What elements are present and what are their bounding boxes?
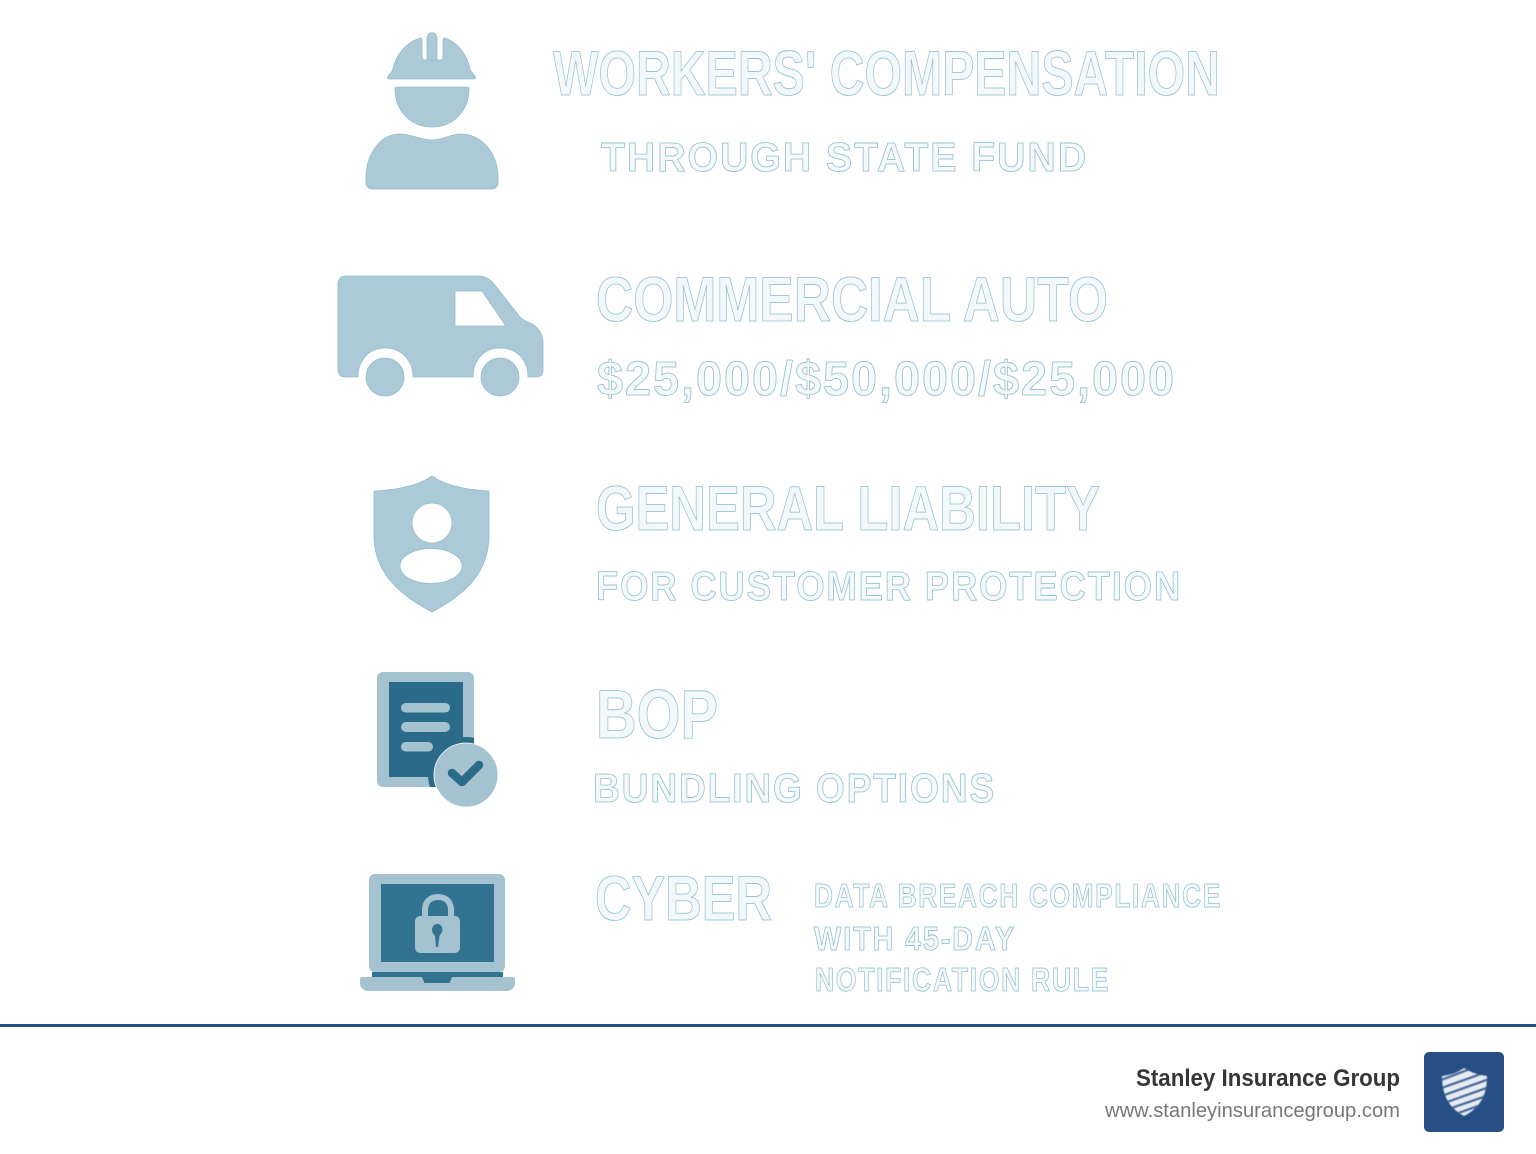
row: commercial auto: [338, 265, 1176, 406]
icon: delivery van: [338, 276, 543, 396]
text block: data breach compliance: NOTIFICATION RULE: [815, 961, 1110, 998]
brand name: Stanley Insurance Group: [1136, 1065, 1400, 1092]
row: cyber: [360, 864, 1222, 998]
icon: laptop with padlock: [360, 874, 515, 991]
icon: construction worker: [366, 33, 498, 189]
heading: commercial auto: COMMERCIAL AUTO: [596, 265, 1108, 335]
row: workers' compensation: [366, 33, 1220, 189]
text block: data breach compliance: DATA BREACH COMPLIANCE: [814, 877, 1222, 914]
subheading: bundling options: BUNDLING OPTIONS: [593, 765, 996, 811]
heading: cyber: CYBER: [595, 864, 772, 934]
row: general liability: [374, 474, 1182, 612]
subheading: for customer protection: FOR CUSTOMER PROTECTION: [596, 563, 1182, 609]
website url: www.stanleyinsurancegroup.com: [1104, 1100, 1400, 1122]
icon: shield with person: [374, 476, 489, 612]
heading: general liability: GENERAL LIABILITY: [596, 474, 1100, 544]
logo: striped shield: [1424, 1052, 1504, 1132]
subheading: through state fund: THROUGH STATE FUND: [601, 134, 1088, 180]
text block: data breach compliance: WITH 45-DAY: [814, 920, 1016, 957]
heading: workers' compensation: WORKERS' COMPENSATION: [553, 39, 1220, 109]
footer: [0, 1024, 1536, 1132]
text block: data breach compliance: [814, 877, 1222, 998]
row: BOP: [377, 672, 996, 813]
icon: document with check: [377, 672, 504, 813]
subheading: limits: $25,000/$50,000/$25,000: [597, 353, 1176, 406]
heading: BOP: BOP: [596, 676, 718, 753]
